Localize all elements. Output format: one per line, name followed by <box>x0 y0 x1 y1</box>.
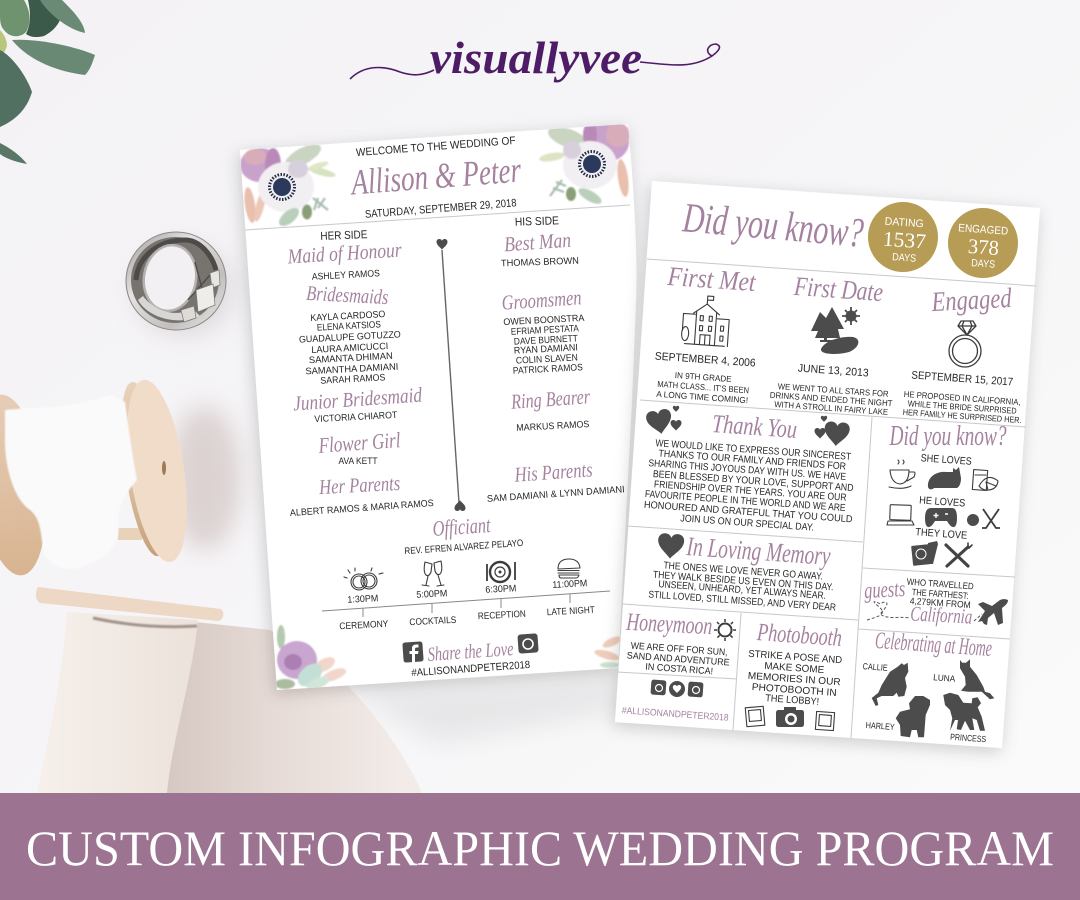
center timeline with hearts <box>436 239 466 511</box>
panel: first met: SEPTEMBER 4, 2006 <box>654 350 756 370</box>
badge: dating <box>868 202 938 272</box>
her side list: Maid of Honour <box>286 238 403 269</box>
photo props: ribbon shadow <box>165 622 422 793</box>
panel: thank you: WE WOULD LIKE TO EXPRESS OUR SINCEREST <box>655 438 851 463</box>
panel: honeymoon: WE ARE OFF FOR SUN, <box>630 641 728 658</box>
panel: guests travelled: THE FARTHEST: <box>911 587 969 601</box>
brand logo <box>350 32 719 83</box>
his side list: THOMAS BROWN <box>501 256 579 269</box>
badge: dating: DATING <box>884 216 924 230</box>
panel: thank you: BEEN BLESSED BY YOUR LOVE, SUPPORT AND <box>653 469 854 494</box>
icon: burger <box>558 559 580 578</box>
panel: first date <box>770 271 893 417</box>
panel: photobooth: MAKE SOME <box>764 661 825 676</box>
badge: engaged <box>948 208 1018 278</box>
couple names: Allison & Peter <box>348 150 523 203</box>
his side list: PATRICK RAMOS <box>513 362 583 377</box>
badge: engaged: ENGAGED <box>958 222 1009 238</box>
floral: bottom right <box>594 636 620 668</box>
panel: thank you: THANKS TO OUR FAMILY AND FRIENDS FOR <box>658 448 846 473</box>
panel: thank you <box>644 406 854 534</box>
icon: instagram <box>517 633 539 654</box>
icon: game controller <box>925 508 957 527</box>
panel: engaged: Engaged <box>930 283 1013 318</box>
hashtag: #ALLISONANDPETER2018 <box>411 659 531 679</box>
floral: bottom left <box>275 625 348 692</box>
panel: engaged: SEPTEMBER 15, 2017 <box>911 369 1014 389</box>
share the love: Share the Love <box>427 638 514 666</box>
panel: thank you: JOIN US ON OUR SPECIAL DAY. <box>680 513 814 534</box>
panel: first date: JUNE 13, 2013 <box>797 363 869 379</box>
panel: in loving memory: THE ONES WE LOVE NEVER GO AWAY. <box>663 560 823 583</box>
icon: rings <box>344 568 383 590</box>
her side list <box>286 229 434 519</box>
badge: engaged: DAYS <box>971 257 996 271</box>
icon: trees and lake <box>811 307 860 354</box>
icon: camera <box>776 707 804 727</box>
panel: photobooth: STRIKE A POSE AND <box>748 649 842 666</box>
icon: heart <box>657 533 685 559</box>
floral: top left <box>240 140 336 229</box>
panel: first met: MATH CLASS... IT'S BEEN <box>657 379 749 395</box>
panel: thank you: FAVOURITE PEOPLE IN THE WORLD AND WE ARE <box>645 489 846 514</box>
icon: laptop <box>887 505 914 525</box>
photo props: spool shadow <box>169 406 241 550</box>
panel: honeymoon: Honeymoon <box>625 609 713 640</box>
right card: did you know <box>615 181 1040 748</box>
icon: school <box>681 294 731 347</box>
panel: photobooth: THE LOBBY! <box>765 693 819 708</box>
her side list: Flower Girl <box>317 427 401 458</box>
icon: baseball <box>967 514 979 526</box>
panel: photobooth: Photobooth <box>755 619 843 652</box>
his side list: RYAN DAMIANI <box>514 342 578 357</box>
panel: did you know small: THEY LOVE <box>915 526 968 542</box>
badge: engaged: 378 <box>967 234 1000 260</box>
officiant: Officiant <box>432 512 492 541</box>
icon: cat lying <box>928 467 961 489</box>
panel: first met: A LONG TIME COMING! <box>656 389 748 405</box>
her side list: SAMANTA DHIMAN <box>309 351 393 366</box>
her side list: KAYLA CARDOSO <box>310 309 386 324</box>
icon: hockey sticks <box>982 509 1000 528</box>
her side list: ALBERT RAMOS & MARIA RAMOS <box>290 498 434 519</box>
panel: photobooth <box>745 619 843 731</box>
panel: thank you: FRIENDSHIP OVER THE YEARS. YOU ARE OUR <box>654 479 847 504</box>
icon: cat luna <box>960 659 994 699</box>
panel: first met: IN 9TH GRADE <box>674 370 732 384</box>
officiant <box>404 512 524 557</box>
badge: dating: DAYS <box>892 251 917 265</box>
her side list: GUADALUPE GOTUZZO <box>299 329 401 346</box>
panel: honeymoon: IN COSTA RICA! <box>645 662 713 677</box>
photo props: wedding rings <box>126 232 234 336</box>
schedule timeline: 6:30PM <box>485 583 517 596</box>
schedule timeline <box>322 559 610 632</box>
panel: honeymoon: SAND AND ADVENTURE <box>626 650 730 669</box>
panel: celebrating at home <box>862 628 994 744</box>
schedule timeline: COCKTAILS <box>409 615 457 628</box>
panel: celebrating at home: Celebrating at Home <box>874 628 993 662</box>
floral: top right <box>539 122 631 207</box>
schedule timeline: 11:00PM <box>552 578 588 591</box>
her side list: Junior Bridesmaid <box>292 383 423 415</box>
left card: wedding program <box>240 122 637 692</box>
panel: first met: First Met <box>666 261 758 297</box>
icon: airplane <box>978 599 1008 625</box>
wedding date: SATURDAY, SEPTEMBER 29, 2018 <box>365 197 517 221</box>
panel: did you know small: SHE LOVES <box>920 452 972 468</box>
panel: in loving memory: STILL LOVED, STILL MISSED, AND VERY DEAR <box>648 589 836 614</box>
his side list: EFRIAM PESTATA <box>511 323 580 338</box>
panel: celebrating at home: CALLIE <box>862 661 888 673</box>
icon: diamond ring <box>949 321 981 367</box>
header text <box>348 135 523 221</box>
panel: honeymoon <box>617 609 737 724</box>
banner <box>0 793 1080 900</box>
badge: dating: 1537 <box>882 227 927 253</box>
panel: honeymoon: #ALLISONANDPETER2018 <box>621 705 729 724</box>
photo props: ribbon spool <box>36 587 223 793</box>
social footer <box>402 633 539 679</box>
photo props: eucalyptus leaves <box>0 0 95 164</box>
panel: thank you: SHARING THIS JOYOUS DAY WITH US. WE HAVE <box>648 458 847 483</box>
her side list: Her Parents <box>318 471 401 499</box>
header text: WELCOME TO THE WEDDING OF <box>356 135 516 159</box>
icon: hearts right <box>814 416 850 447</box>
her side list: HER SIDE <box>320 229 368 243</box>
schedule timeline: 5:00PM <box>416 588 448 601</box>
her side list: Bridesmaids <box>306 281 389 309</box>
panel: guests travelled: WHO TRAVELLED <box>906 577 974 591</box>
panel: thank you: Thank You <box>711 409 798 444</box>
his side list: His Parents <box>513 457 593 487</box>
panel: in loving memory <box>648 531 836 614</box>
her side list: VICTORIA CHIAROT <box>314 410 398 425</box>
icon: champagne <box>422 561 444 586</box>
panel: celebrating at home: LUNA <box>933 672 956 684</box>
icon: sun <box>714 619 736 641</box>
panel: engaged: WHILE THE BRIDE SURPRISED <box>907 398 1017 416</box>
panel: celebrating at home: PRINCESS <box>950 732 987 744</box>
schedule timeline: CEREMONY <box>339 619 389 632</box>
her side list: SARAH RAMOS <box>320 372 386 387</box>
icon: pug princess <box>943 693 985 731</box>
panel: guests travelled: guests <box>863 576 906 603</box>
icon: passport and tickets <box>911 541 938 566</box>
icon: hearts left <box>645 406 682 436</box>
panel: did you know small: Did you know? <box>889 420 1007 452</box>
main heading: Did you know? <box>680 195 865 257</box>
her side list: AVA KETT <box>338 456 378 467</box>
panel: first date: DRINKS AND ENDED THE NIGHT <box>770 390 893 408</box>
his side list: MARKUS RAMOS <box>516 419 590 434</box>
his side list: Ring Bearer <box>510 384 591 414</box>
panel: thank you: HONOURED AND GRATEFUL THAT YOU COULD <box>644 500 853 525</box>
panel: engaged: HER FAMILY HE SURPRISED HER. <box>903 407 1022 425</box>
panel: celebrating at home: HARLEY <box>865 720 895 732</box>
his side list: DAVE BURNETT <box>514 333 578 348</box>
panel: photobooth: MEMORIES IN OUR <box>747 671 841 688</box>
panel: photobooth: PHOTOBOOTH IN <box>751 682 837 699</box>
panel: guests travelled: California <box>910 601 973 629</box>
panel: in loving memory: UNSEEN, UNHEARD, YET ALWAYS NEAR. <box>658 579 826 602</box>
icon: facebook <box>402 641 424 663</box>
photo props: card shadow on surface <box>350 672 618 745</box>
banner: CUSTOM INFOGRAPHIC WEDDING PROGRAM <box>26 820 1054 876</box>
icon: polaroid right <box>815 711 835 731</box>
schedule timeline: RECEPTION <box>478 609 526 622</box>
panel: engaged <box>903 283 1022 425</box>
icon: dog harley <box>896 696 930 737</box>
panel: guests travelled: 4,279KM FROM <box>909 596 971 610</box>
panel: first date: First Date <box>792 271 884 307</box>
icon: drink and lime <box>972 470 998 490</box>
icon: place setting <box>487 562 515 582</box>
her side list: ELENA KATSIOS <box>317 319 381 334</box>
officiant: REV. EFREN ALVAREZ PELAYO <box>404 538 524 557</box>
panel: guests travelled <box>863 576 1008 629</box>
his side list: Best Man <box>503 228 572 256</box>
panel: in loving memory: In Loving Memory <box>685 531 832 571</box>
icons: instagram and heart <box>650 679 704 697</box>
icon: fork and knife <box>946 543 972 566</box>
icon: tea cup <box>889 460 915 488</box>
his side list: OWEN BOONSTRA <box>503 313 585 328</box>
route dashed line <box>867 602 982 621</box>
icon: polaroid left <box>745 706 765 727</box>
schedule timeline: LATE NIGHT <box>547 605 595 618</box>
his side list <box>487 215 625 505</box>
panel: first date: WE WENT TO ALL STARS FOR <box>777 381 889 399</box>
panel: did you know small: HE LOVES <box>919 494 966 510</box>
schedule timeline: 1:30PM <box>347 593 379 606</box>
his side list: Groomsmen <box>501 285 582 315</box>
her side list: ASHLEY RAMOS <box>312 268 380 283</box>
brand logo: visuallyvee <box>430 32 642 83</box>
his side list: COLIN SLAVEN <box>516 352 578 367</box>
her side list: LAURA AMICUCCI <box>311 341 389 356</box>
panel: did you know small <box>887 420 1007 566</box>
icon: cat callie <box>872 663 908 706</box>
panel: first date: WITH A STROLL IN FAIRY LAKE <box>774 399 889 417</box>
panel: in loving memory: THEY WALK BESIDE US EVEN ON THIS DAY. <box>653 570 834 593</box>
panel: engaged: HE PROPOSED IN CALIFORNIA, <box>904 389 1021 407</box>
his side list: HIS SIDE <box>515 215 559 229</box>
his side list: SAM DAMIANI & LYNN DAMIANI <box>487 484 625 505</box>
her side list: SAMANTHA DAMIANI <box>305 362 399 377</box>
panel: first met <box>654 261 758 405</box>
photo props: white silk spool <box>0 376 197 579</box>
